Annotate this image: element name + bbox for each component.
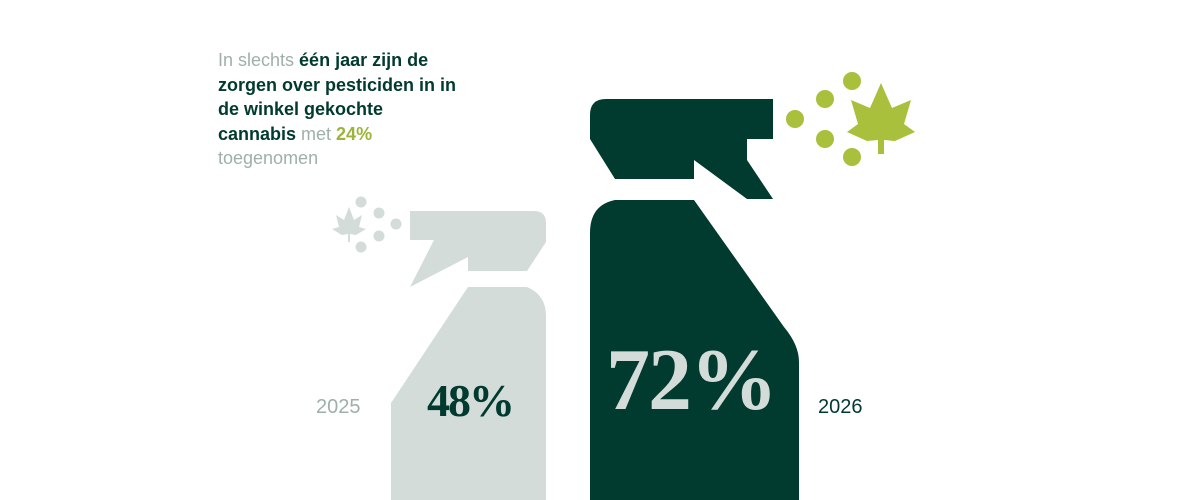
title text: In slechts één jaar zijn de xyxy=(218,50,428,70)
value 72%: 72% xyxy=(606,332,776,429)
icon: spray dots and leaf light xyxy=(332,196,402,252)
title text: toegenomen xyxy=(218,148,318,168)
bottle 2025 light xyxy=(391,211,546,500)
title text xyxy=(218,50,456,168)
label 2025: 2025 xyxy=(316,396,360,418)
title text: zorgen over pesticiden in in xyxy=(218,74,456,94)
label 2026: 2026 xyxy=(818,396,862,418)
title text: cannabis met 24% xyxy=(218,124,372,144)
value 48%: 48% xyxy=(427,375,513,426)
icon: spray dots and leaf green xyxy=(786,72,915,166)
bottle 2026 dark xyxy=(590,99,799,500)
title text: de winkel gekochte xyxy=(218,99,383,119)
